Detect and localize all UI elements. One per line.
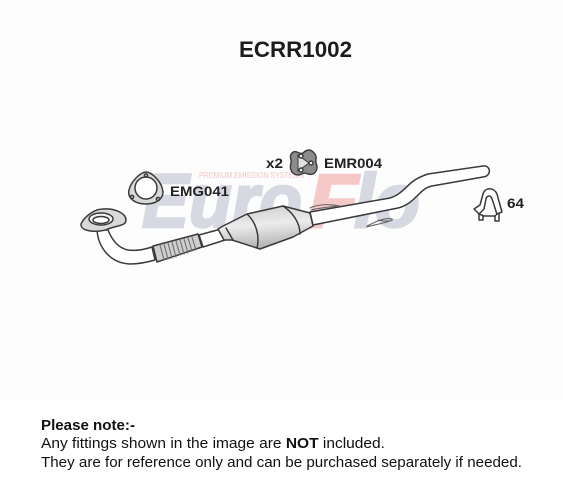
- watermark logo: F: [308, 159, 361, 244]
- hanger brackets: [310, 205, 392, 227]
- tail pipe: [310, 166, 489, 225]
- label x2: x2: [266, 155, 283, 171]
- watermark logo: lo: [354, 159, 420, 244]
- icon: rubber mount EMR004: [290, 150, 317, 175]
- note line 2: They are for reference only and can be purchased separately if needed.: [41, 454, 522, 471]
- note line 1: Any fittings shown in the image are NOT included.: [41, 435, 385, 452]
- label EMR004: EMR004: [324, 155, 382, 171]
- label 64: 64: [507, 195, 524, 211]
- exhaust assembly: [81, 166, 489, 264]
- mid pipe: [199, 229, 225, 247]
- icon: U-clamp: [474, 189, 502, 221]
- front pipe: [97, 230, 155, 264]
- catalytic converter: [218, 206, 313, 249]
- flexible section: [153, 234, 202, 262]
- note heading: Please note:-: [41, 417, 135, 434]
- watermark logo: [142, 159, 420, 244]
- watermark logo: PREMIUM EMISSION SYSTEMS: [199, 171, 304, 180]
- gasket EMG041: [129, 172, 163, 204]
- note: [41, 417, 522, 471]
- title: ECRR1002: [239, 37, 352, 62]
- watermark logo: Euro: [142, 159, 302, 244]
- label EMG041: EMG041: [170, 183, 229, 199]
- inlet flange: [81, 209, 126, 231]
